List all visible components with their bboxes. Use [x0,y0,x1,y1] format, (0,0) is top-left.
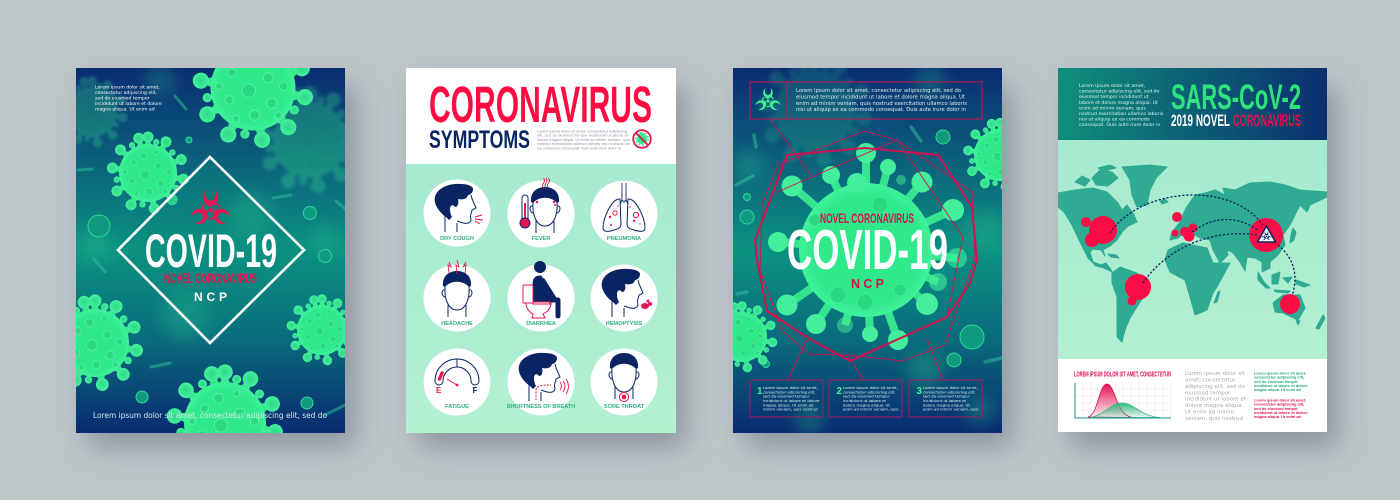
red note: magna aliqua. Ut enim ad [1254,414,1302,419]
NCP label: NCP [194,290,227,304]
numbered box 1: sed do eiusmod tempor [763,394,810,399]
NCP label: NCP [851,277,884,291]
subheading: NOVEL CORONAVIRUS [164,270,257,286]
green note: Lorem ipsum dolor sit amet, [1254,370,1306,376]
green note: consectetur adipiscing elit, [1254,375,1304,380]
header text [1079,83,1164,128]
icon: headache [424,260,490,332]
red note [1254,398,1308,419]
intro text [95,84,162,112]
icon: diarrhea: DIARRHEA [526,321,556,327]
poster shadows [88,86,1338,448]
gray paragraph: eiusmod tempor [1185,390,1231,396]
icon: fatigue gauge [424,348,490,416]
numbered box 2: 2 [836,386,842,397]
numbered box 1: minim veniam, quis nostrud [763,407,818,412]
poster heading: COVID-19 [787,218,948,282]
numbered box 2 [829,380,902,417]
intro text: consectetur adipiscing elit, [95,90,158,96]
gray paragraph: dolore magna aliqua. [1185,403,1244,409]
gray paragraph: Lorem ipsum dolor sit [1185,371,1246,377]
icon: dry cough: DRY COUGH [440,236,474,242]
icon: biohazard [189,190,232,227]
numbered box 1: incididunt ut labore et dolore [763,398,820,403]
gray paragraph [1185,371,1247,422]
green note: sed do eiusmod tempor [1254,379,1298,384]
numbered box 3: incididunt ut labore et [923,398,967,403]
icon: shortness of breath [507,348,575,416]
numbered box 1: Lorem ipsum dolor sit amet, [763,385,818,390]
numbered box 2: enim ad minim veniam, quis [843,407,898,412]
icon: fever [508,178,574,248]
icon: fever: FEVER [532,236,550,242]
description: ea commodo consequat. Duis aute irure dolor in [537,146,621,150]
icon: pneumonia: PNEUMONIA [607,236,641,242]
green note: magna aliqua. Ut enim ad [1254,387,1302,392]
red note: Lorem ipsum dolor sit amet, [1254,398,1306,402]
red note: sed do eiusmod tempor [1254,406,1298,411]
numbered box 3: enim ad minim veniam, quis [923,407,978,412]
icon: fatigue gauge: FATIGUE [445,404,469,410]
red note: consectetur adipiscing elit, [1254,402,1304,407]
chart title: LOREM IPSUM DOLOR SIT AMET, CONSECTETUR [1074,370,1171,378]
subtitle: 2019 NOVEL [1171,112,1230,130]
header text: labore et dolore magna aliqua. Ut [1079,100,1158,106]
icon: sore throat: SORE THROAT [604,404,645,410]
green note [1254,370,1308,392]
numbered box 2: dolore magna aliqua. Ut [843,402,890,407]
subheading: NOVEL CORONAVIRUS [820,210,914,226]
icon: fatigue gauge: E [436,386,442,395]
poster heading: COVID-19 [145,224,277,277]
header text: enim ad minim veniam, quis [1079,105,1146,111]
icon: sore throat [590,348,658,416]
info box with biohazard: Lorem ipsum dolor sit amet, consectetur adipiscing elit, sed do [796,88,961,94]
numbered box 3: sed do eiusmod tempor [923,394,970,399]
numbered box 2: consectetur adipiscing elit, [843,389,896,394]
intro text: Lorem ipsum dolor sit amet, [95,84,160,90]
header text: consequat. Duis aute irure dolor in [1079,122,1160,128]
numbered box 2: Lorem ipsum dolor sit amet, [843,385,898,390]
gray paragraph: amet, consectetur [1185,378,1236,384]
info box with biohazard: eiusmod tempor incididunt ut labore et dolore magna aliqua. Ut [796,94,965,100]
virus background field [76,68,345,433]
header text: consectetur adipiscing elit, sed do [1079,89,1160,95]
header text: nisi ut aliquip ex ea commodo [1079,117,1150,123]
gray paragraph: incididunt ut labore et [1185,397,1247,403]
numbered box 3: dolore magna aliqua. Ut [923,402,970,407]
icon: shortness of breath: SHORTNESS OF BREATH [507,404,575,410]
numbered box 2: incididunt ut labore et [843,398,887,403]
header band [1058,68,1327,140]
red note: incididunt ut labore et dolore [1254,410,1308,415]
description: elit, sed do eiusmod tempor incididunt ut labore et [537,132,629,138]
diamond frame [118,157,304,343]
bell curve chart [1075,383,1171,418]
white footer [1058,359,1327,432]
panel: COVID-19 diamond poster [76,68,345,433]
intro text: incididunt ut labore et dolore [95,101,162,107]
footer text: Lorem ipsum dolor sit amet, consectetur adipiscing elit, sed do [93,411,327,420]
numbered box 3: Lorem ipsum dolor sit amet, [923,385,978,390]
icon: hemoptysis [590,264,658,332]
icon: diarrhea [508,261,574,332]
numbered box 3: consectetur adipiscing elit, [923,389,976,394]
gray paragraph: adipiscing elit, sed do [1185,384,1246,390]
gray paragraph: Ut enim ad minim [1185,409,1234,415]
description: Lorem ipsum dolor sit amet, consectetur adipiscing [537,128,627,134]
title: SARS-CoV-2 [1171,78,1301,117]
icon: fatigue gauge: F [472,386,478,395]
numbered box 3: 3 [916,386,922,397]
green note: incididunt ut labore et dolore [1254,383,1308,388]
numbered box 3 [909,380,982,417]
icon: warning triangle [1258,226,1276,242]
panel: SARS-CoV-2 map poster [1058,68,1327,432]
subtitle accent: CORONAVIRUS [1233,112,1301,130]
info box with biohazard [750,82,982,119]
panel: symptoms poster [406,68,676,433]
numbered box 1 [750,380,823,417]
header text: eiusmod tempor incididunt ut [1079,94,1149,100]
icon: headache: HEADACHE [441,321,473,327]
info box with biohazard: nisi ut aliquip ex ea commodo consequat. Duis aute irure dolor in [796,107,966,113]
virus background field [733,68,1002,433]
icon: pneumonia [590,180,658,248]
description: dolore magna aliqua. Ut enim ad minim veniam, quis [537,137,630,142]
icon: no virus [633,130,651,148]
outbreak circles [1081,212,1300,314]
intro text: sed do eiusmod tempor [95,96,150,102]
description [537,128,630,150]
dotted spread routes [1110,195,1295,296]
intro text: magna aliqua. Ut enim ad [95,106,155,112]
numbered box 1: magna aliqua. Ut enim ad [763,402,814,407]
subtitle: SYMPTOMS [429,126,530,154]
title: CORONAVIRUS [429,76,652,133]
header text: Lorem ipsum dolor sit amet, [1079,83,1146,89]
icon: dry cough [424,180,490,246]
info box with biohazard: enim ad minim veniam, quis nostrud exercitation ullamco laboris [796,101,967,107]
description: nostrud exercitation ullamco laboris nisi ut aliquip ex [537,141,630,146]
numbered box 2: sed do eiusmod tempor [843,394,890,399]
world map [1058,140,1327,359]
gray paragraph: veniam, quis nostrud [1185,416,1243,422]
numbered box 1: consectetur adipiscing elit, [763,389,816,394]
panel: COVID-19 geometric poster [733,68,1002,433]
big virus [768,143,967,350]
icon: hemoptysis: HEMOPTYSIS [606,321,643,327]
header text: nostrud exercitation ullamco laboris [1079,111,1164,117]
numbered box 1: 1 [757,386,763,397]
red polygon wireframe [755,119,977,379]
